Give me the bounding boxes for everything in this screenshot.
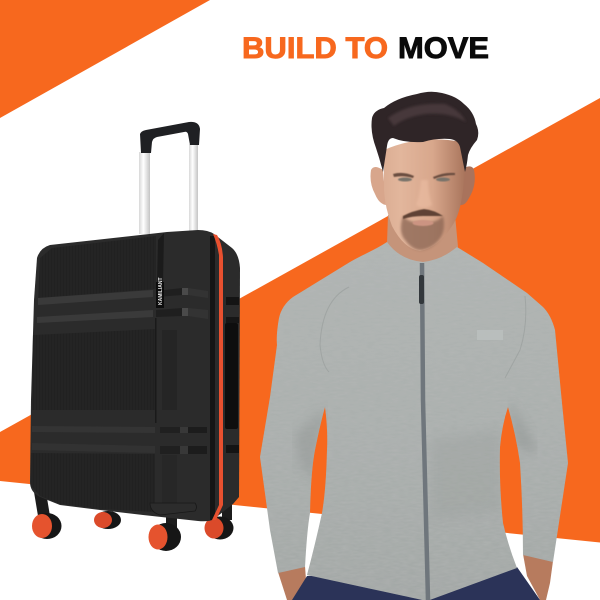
upper straps [37, 288, 208, 323]
suitcase body [30, 230, 240, 521]
suitcase [30, 122, 240, 551]
bottom ribbed panel [31, 453, 155, 512]
jacket shading [296, 415, 534, 472]
trousers [292, 567, 540, 600]
neck [387, 215, 458, 264]
background band: orange diagonal [0, 98, 600, 542]
title: MOVE [398, 32, 489, 65]
vertical seams [155, 236, 215, 520]
top ribbed panel [38, 236, 156, 298]
raglan seams [320, 287, 526, 378]
wheels [32, 492, 234, 551]
right hand [523, 554, 553, 600]
luggage strap [157, 233, 164, 283]
side handle recess [225, 297, 239, 453]
hair highlights [388, 104, 466, 126]
brand tag: KAMILIANT [158, 278, 164, 305]
chest logo [477, 330, 503, 340]
hair [372, 92, 478, 172]
telescopic handle [139, 122, 200, 234]
left hand [278, 566, 306, 600]
man [260, 92, 568, 600]
bottom corner caps [150, 503, 196, 515]
brand tag [156, 278, 164, 308]
lower straps [32, 426, 207, 454]
right ear [460, 166, 475, 205]
face [384, 139, 465, 251]
title: BUILD TO [242, 32, 388, 65]
zipper [422, 263, 428, 600]
beard [401, 209, 444, 250]
eyes and brows [393, 173, 455, 182]
red zipper stripe [212, 234, 223, 520]
middle ribbed panel [32, 329, 155, 410]
nose [416, 180, 432, 208]
left ear [370, 167, 386, 205]
background triangle: top left [0, 0, 210, 118]
jacket [260, 242, 568, 600]
title [242, 32, 489, 65]
zip pull [419, 275, 424, 304]
